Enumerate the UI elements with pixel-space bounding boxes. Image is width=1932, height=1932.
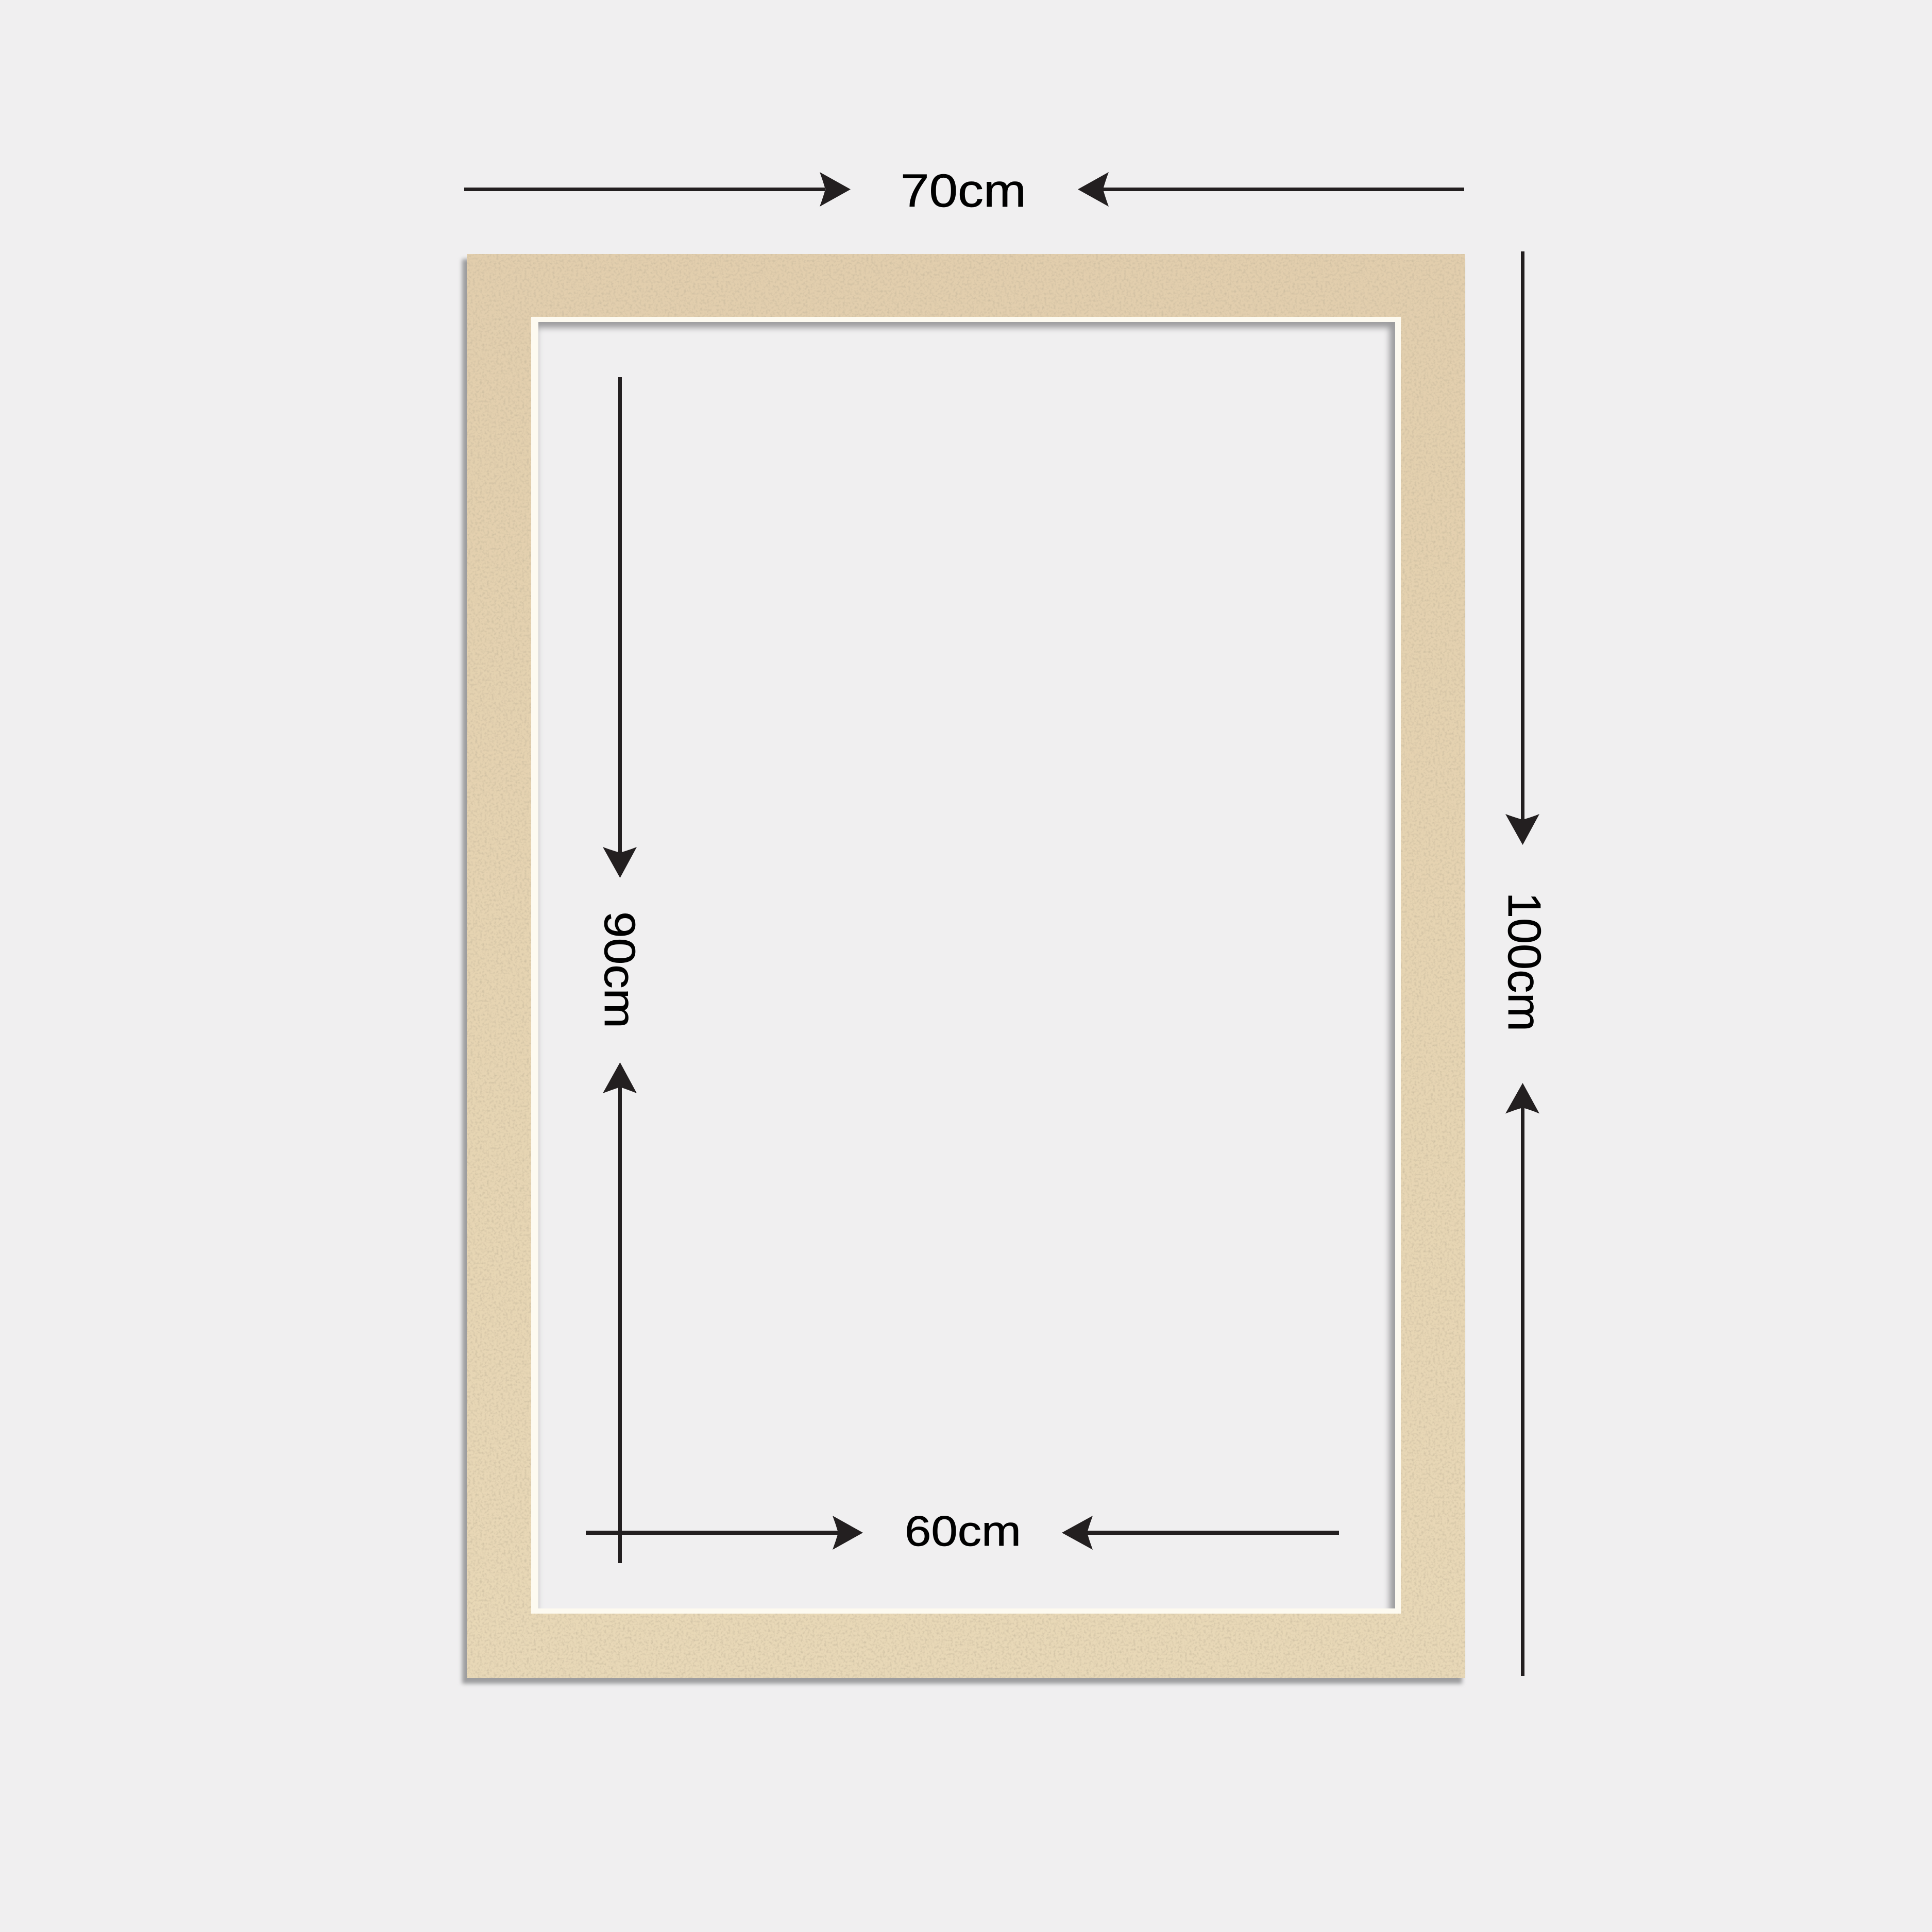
cream bevel (531, 317, 1401, 1614)
inner width arrow, left (586, 1516, 863, 1550)
mat drop shadow (462, 259, 1462, 1684)
inner height arrow, upper (603, 377, 637, 878)
label: outer height: 100cm (1498, 892, 1550, 1031)
passe-partout mat (462, 254, 1465, 1684)
mat board (467, 254, 1465, 1678)
aperture inner shadow (538, 322, 1395, 1608)
label: inner height: 90cm (596, 911, 644, 1028)
label: outer width: 70cm (901, 165, 1026, 217)
aperture opening (531, 317, 1401, 1614)
top width arrow, left (464, 172, 851, 207)
right height arrow, lower (1505, 1083, 1539, 1676)
label: inner width: 60cm (905, 1507, 1021, 1555)
inner height arrow, lower (603, 1062, 637, 1563)
top width arrow, right (1078, 172, 1464, 207)
infographic canvas (460, 172, 1541, 1686)
inner width arrow, right (1062, 1516, 1339, 1550)
right height arrow, upper (1505, 251, 1539, 845)
